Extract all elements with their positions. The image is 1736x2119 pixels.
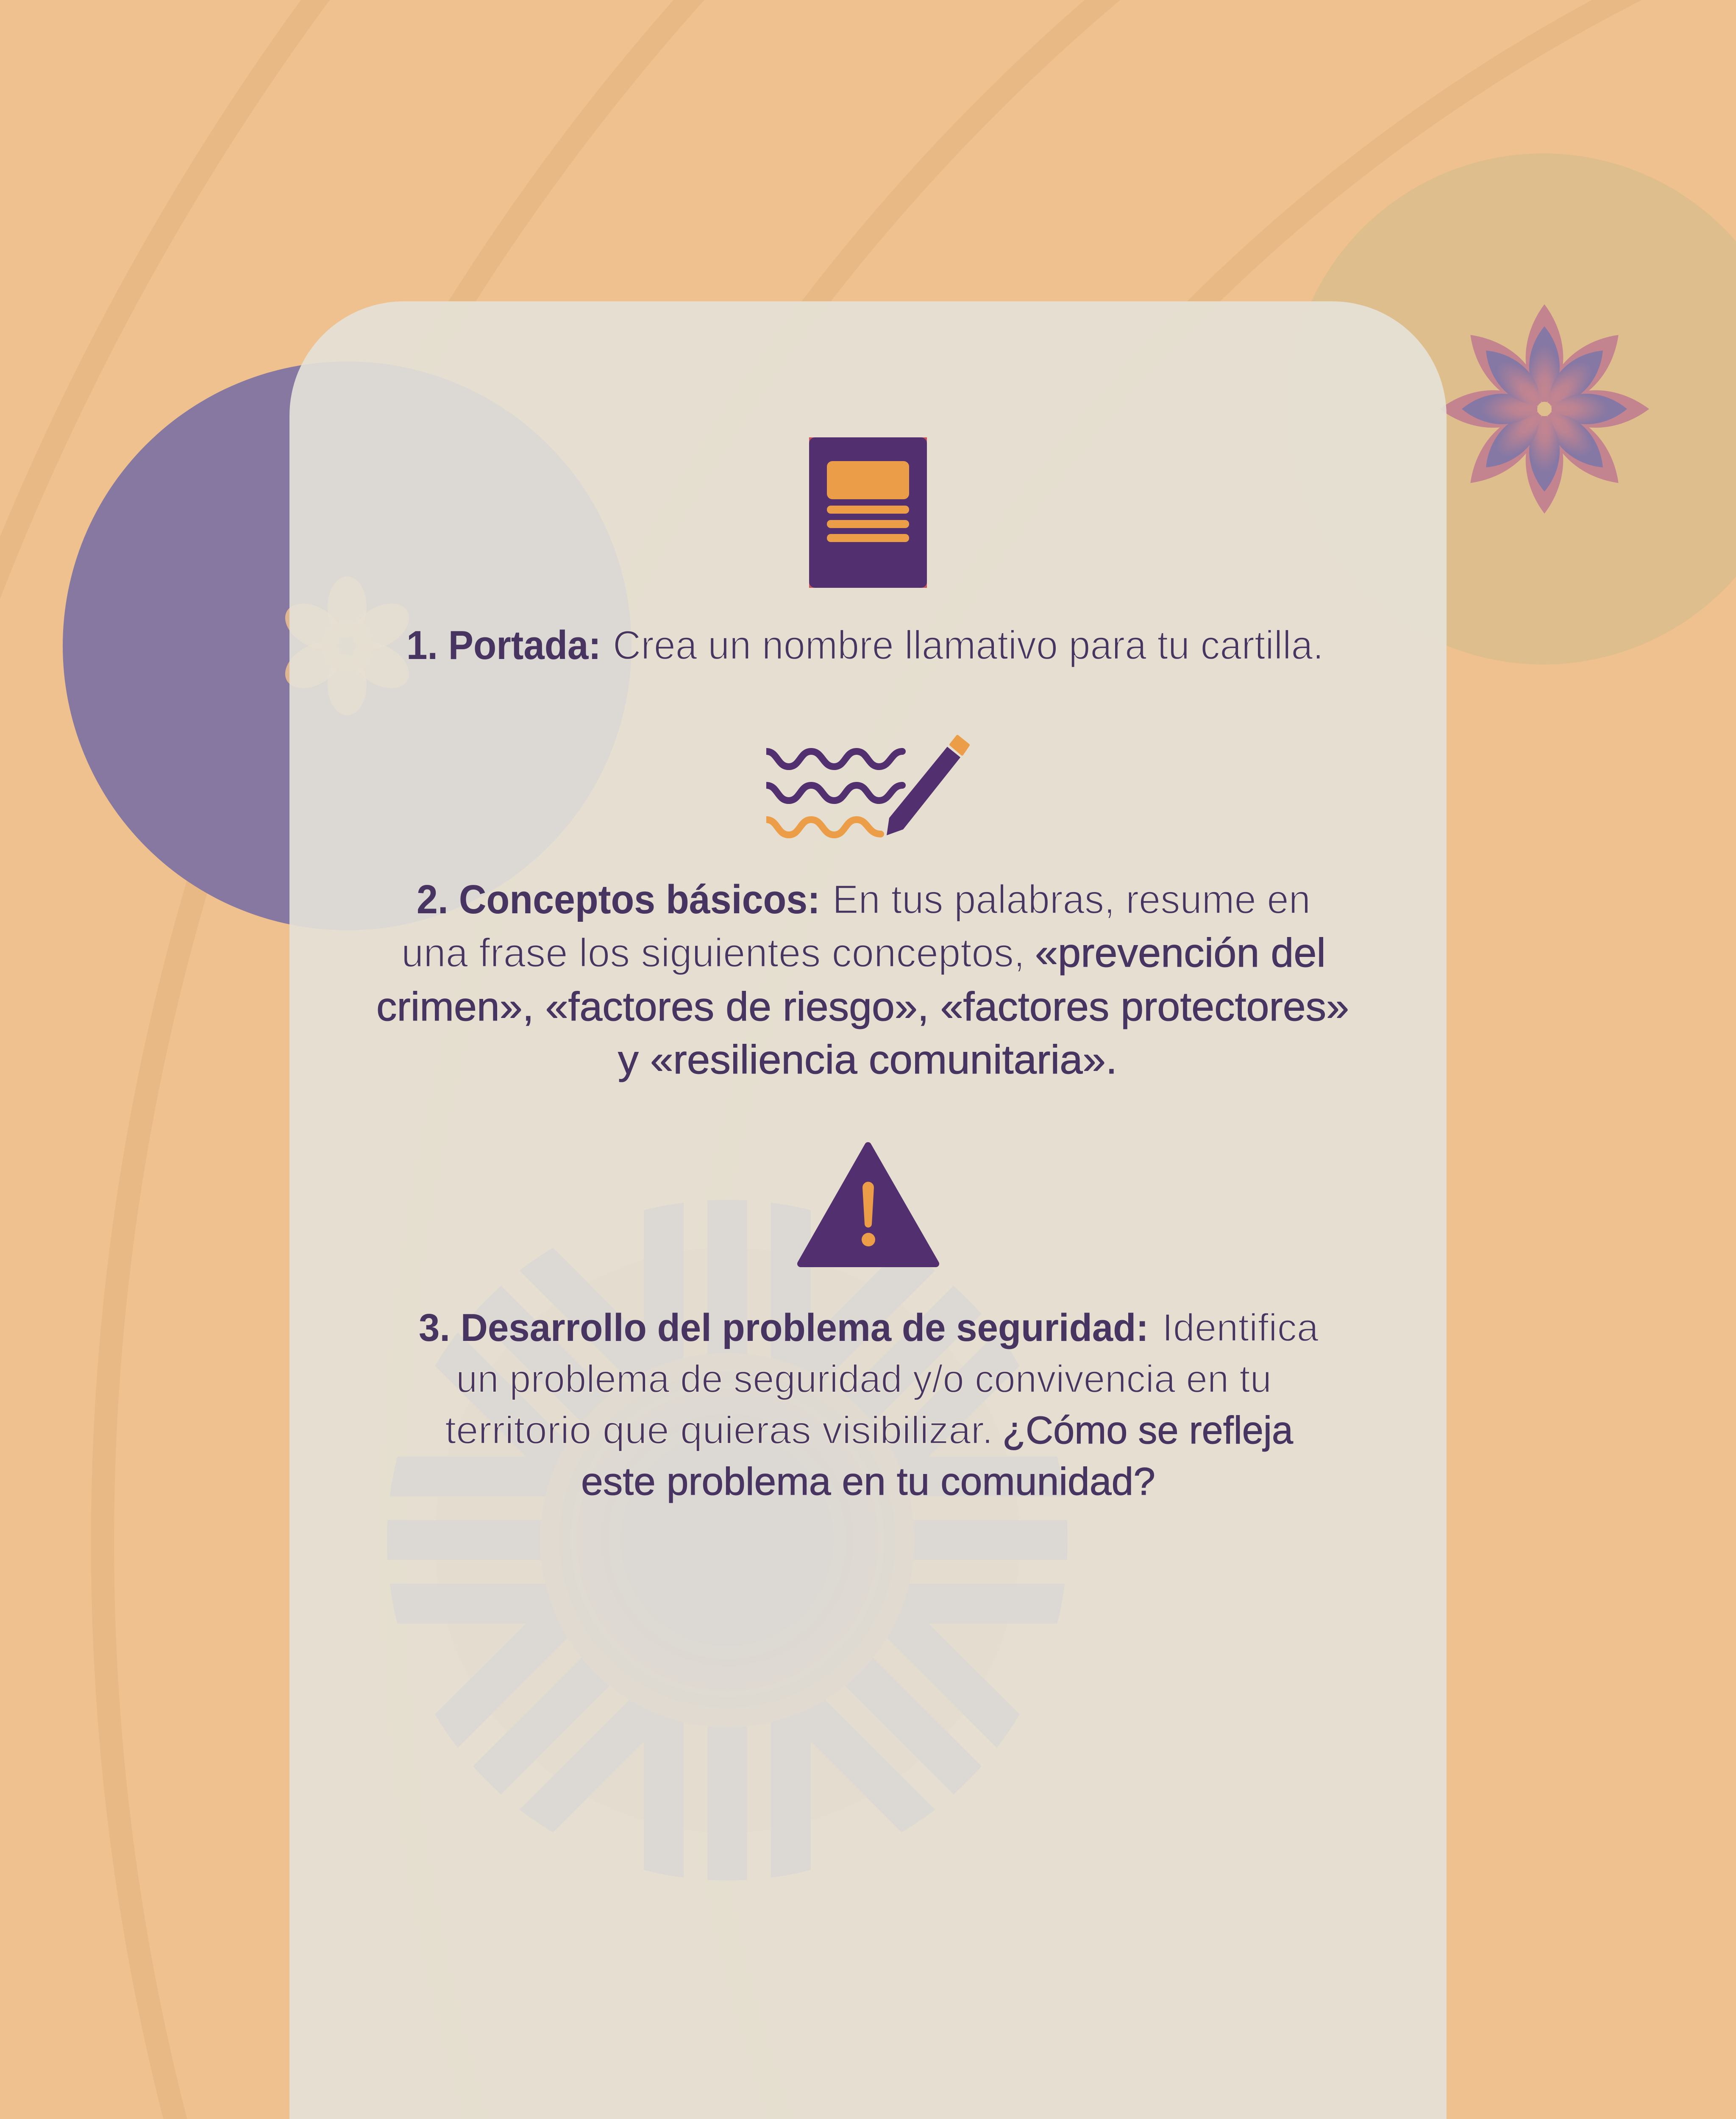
central sun emblem watermark (380, 1193, 1075, 1888)
icon: eight petal flower (1440, 304, 1649, 514)
text: step 3 desarrollo del problema: ¿Cómo se refleja (1002, 1409, 1294, 1452)
text: step 3 desarrollo del problema: Identifica (1162, 1306, 1319, 1349)
text: step 2 conceptos basicos (376, 877, 1349, 1082)
panel: main translucent card (289, 301, 1447, 2119)
text: step 3 desarrollo del problema: un problema de seguridad y/o convivencia en tu (456, 1357, 1271, 1401)
top right decoration: circle with flower (1288, 153, 1736, 665)
text: step 3 desarrollo del problema: este problema en tu comunidad? (581, 1460, 1155, 1503)
text: step 1 portada: 1. Portada: (406, 623, 601, 668)
text: step 3 desarrollo del problema (419, 1306, 1319, 1503)
icon: booklet cover (809, 437, 927, 588)
text: step 2 conceptos basicos: y «resiliencia comunitaria». (618, 1037, 1117, 1082)
text: step 2 conceptos basicos: 2. Conceptos básicos: (417, 877, 820, 922)
text: step 2 conceptos basicos: crimen», «factores de riesgo», «factores protectores» (376, 984, 1349, 1029)
text: step 3 desarrollo del problema: territorio que quieras visibilizar. (445, 1409, 993, 1452)
text: step 3 desarrollo del problema: 3. Desarrollo del problema de seguridad: (419, 1306, 1149, 1349)
top left decoration: purple circle with small flower (63, 362, 632, 930)
icon: writing lines and pencil (766, 736, 968, 837)
text: step 2 conceptos basicos: En tus palabras, resume en (832, 877, 1310, 922)
text: step 2 conceptos basicos: una frase los siguientes conceptos, (401, 930, 1025, 976)
text: step 2 conceptos basicos: «prevención del (1035, 930, 1326, 976)
text: step 1 portada: Crea un nombre llamativo para tu cartilla. (613, 623, 1324, 668)
icon: warning triangle (801, 1146, 936, 1264)
